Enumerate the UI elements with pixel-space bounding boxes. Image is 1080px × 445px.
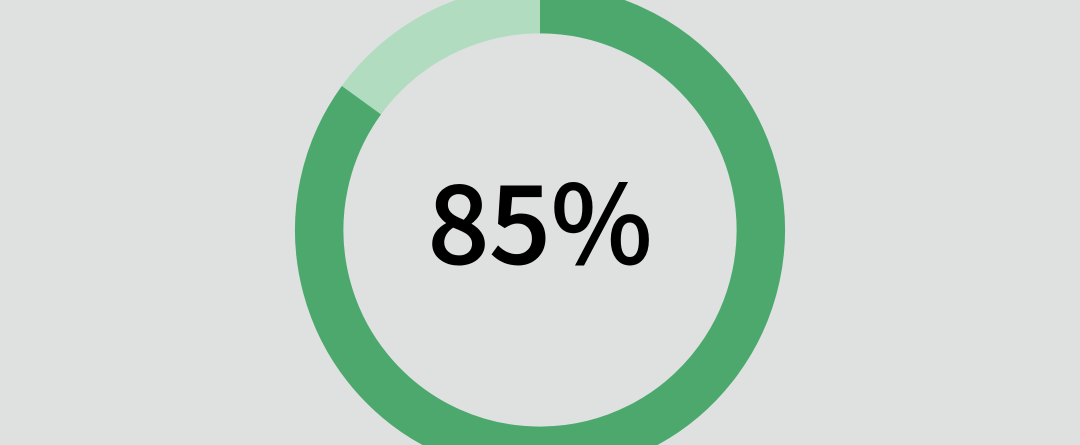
ring segment: filled 85%: [319, 9, 761, 445]
ring segment: remaining 15%: [319, 9, 761, 445]
donut ring: [319, 9, 761, 445]
center value: 85%: [428, 140, 652, 296]
